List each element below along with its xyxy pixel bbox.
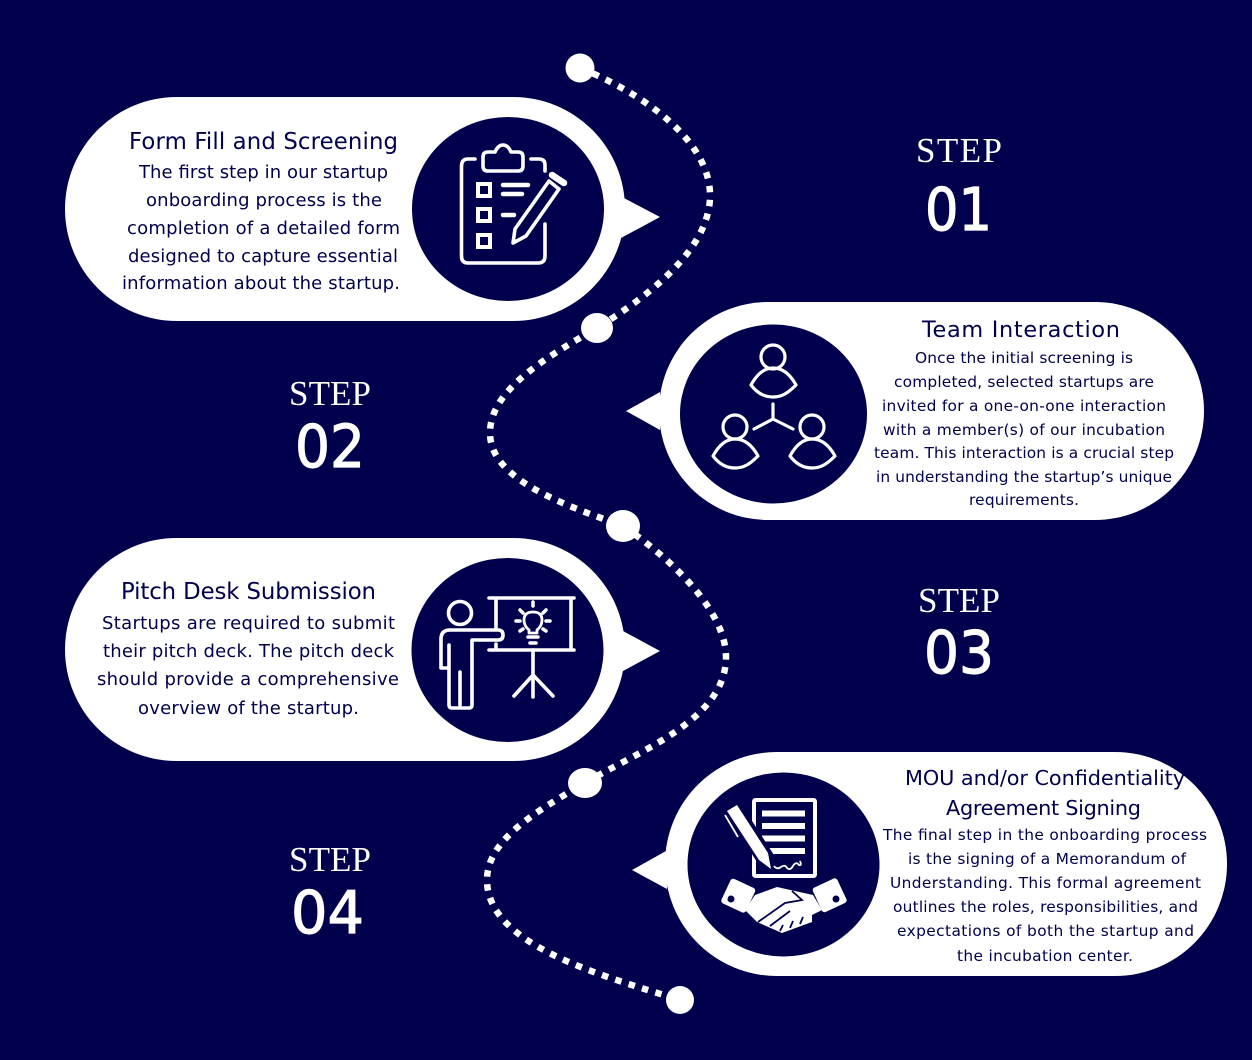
heading: form fill and screening: Form Fill and Screening [129, 129, 398, 155]
text block: step 1 description: The first step in our startup [138, 162, 388, 183]
step label: step 04 [289, 840, 371, 947]
text block: step 4 description: expectations of both the startup and [897, 922, 1194, 940]
panel: step 2 team interaction [626, 302, 1204, 520]
text block: step 2 description: with a member(s) of our incubation [883, 421, 1165, 439]
icon: presenter at board with light bulb [441, 598, 574, 708]
text block: step 2 description: completed, selected startups are [894, 373, 1154, 391]
text block: step 1 description: designed to capture essential [128, 246, 398, 267]
text block: step 4 description: The final step in the onboarding process [882, 826, 1207, 844]
text block: step 2 description [874, 349, 1174, 509]
text block: step 3 description: their pitch deck. The pitch deck [103, 641, 395, 662]
icon: signed document and handshake [720, 800, 848, 933]
text block: step 3 description: should provide a comprehensive [97, 669, 399, 690]
text block: step 1 description [122, 162, 400, 294]
step label: step 02 [289, 374, 371, 481]
text block: step 1 description: onboarding process is the [146, 190, 382, 211]
text block: step 3 description: overview of the startup. [138, 698, 359, 719]
text block: step 2 description: team. This interaction is a crucial step [874, 444, 1174, 462]
step label: step 01 [916, 131, 1002, 244]
step label: step 03: 03 [924, 618, 994, 687]
panel: step 1 form fill and screening [65, 97, 660, 321]
dotted connector path [487, 54, 726, 1014]
step label: step 04: STEP [289, 840, 371, 879]
text block: step 2 description: requirements. [969, 491, 1079, 509]
panel: step 4 MOU signing [632, 752, 1227, 976]
text block: step 4 description: Understanding. This formal agreement [890, 874, 1201, 892]
text block: step 2 description: in understanding the startup’s unique [876, 468, 1172, 486]
text block: step 4 description: outlines the roles, responsibilities, and [893, 898, 1198, 916]
text block: step 4 description: is the signing of a Memorandum of [908, 850, 1187, 868]
text block: step 2 description: invited for a one-on-one interaction [882, 397, 1166, 415]
heading: MOU and confidentiality agreement signing: Agreement Signing [946, 796, 1141, 820]
text block: step 4 description: the incubation center. [957, 947, 1133, 965]
text block: step 1 description: completion of a detailed form [127, 218, 400, 239]
heading: pitch desk submission: Pitch Desk Submission [121, 579, 376, 605]
heading: team interaction: Team Interaction [921, 317, 1120, 343]
text block: step 1 description: information about the startup. [122, 273, 400, 294]
panel: step 3 pitch desk submission [65, 538, 660, 761]
step label: step 03 [918, 581, 1000, 687]
step label: step 03: STEP [918, 581, 1000, 620]
heading: MOU and confidentiality agreement signing: MOU and/or Confidentiality [905, 766, 1185, 790]
text block: step 3 description: Startups are required to submit [102, 613, 395, 634]
icon: clipboard checklist with pencil [462, 145, 564, 263]
heading: MOU and confidentiality agreement signing [905, 766, 1185, 820]
step label: step 01: 01 [925, 175, 992, 244]
icon: three connected people [713, 345, 835, 468]
text block: step 3 description [97, 613, 399, 719]
step label: step 04: 04 [291, 878, 364, 947]
step label: step 02: STEP [289, 374, 371, 413]
step label: step 01: STEP [916, 131, 1002, 170]
step label: step 02: 02 [295, 412, 365, 481]
text block: step 2 description: Once the initial screening is [915, 349, 1133, 367]
text block: step 4 description [882, 826, 1207, 965]
